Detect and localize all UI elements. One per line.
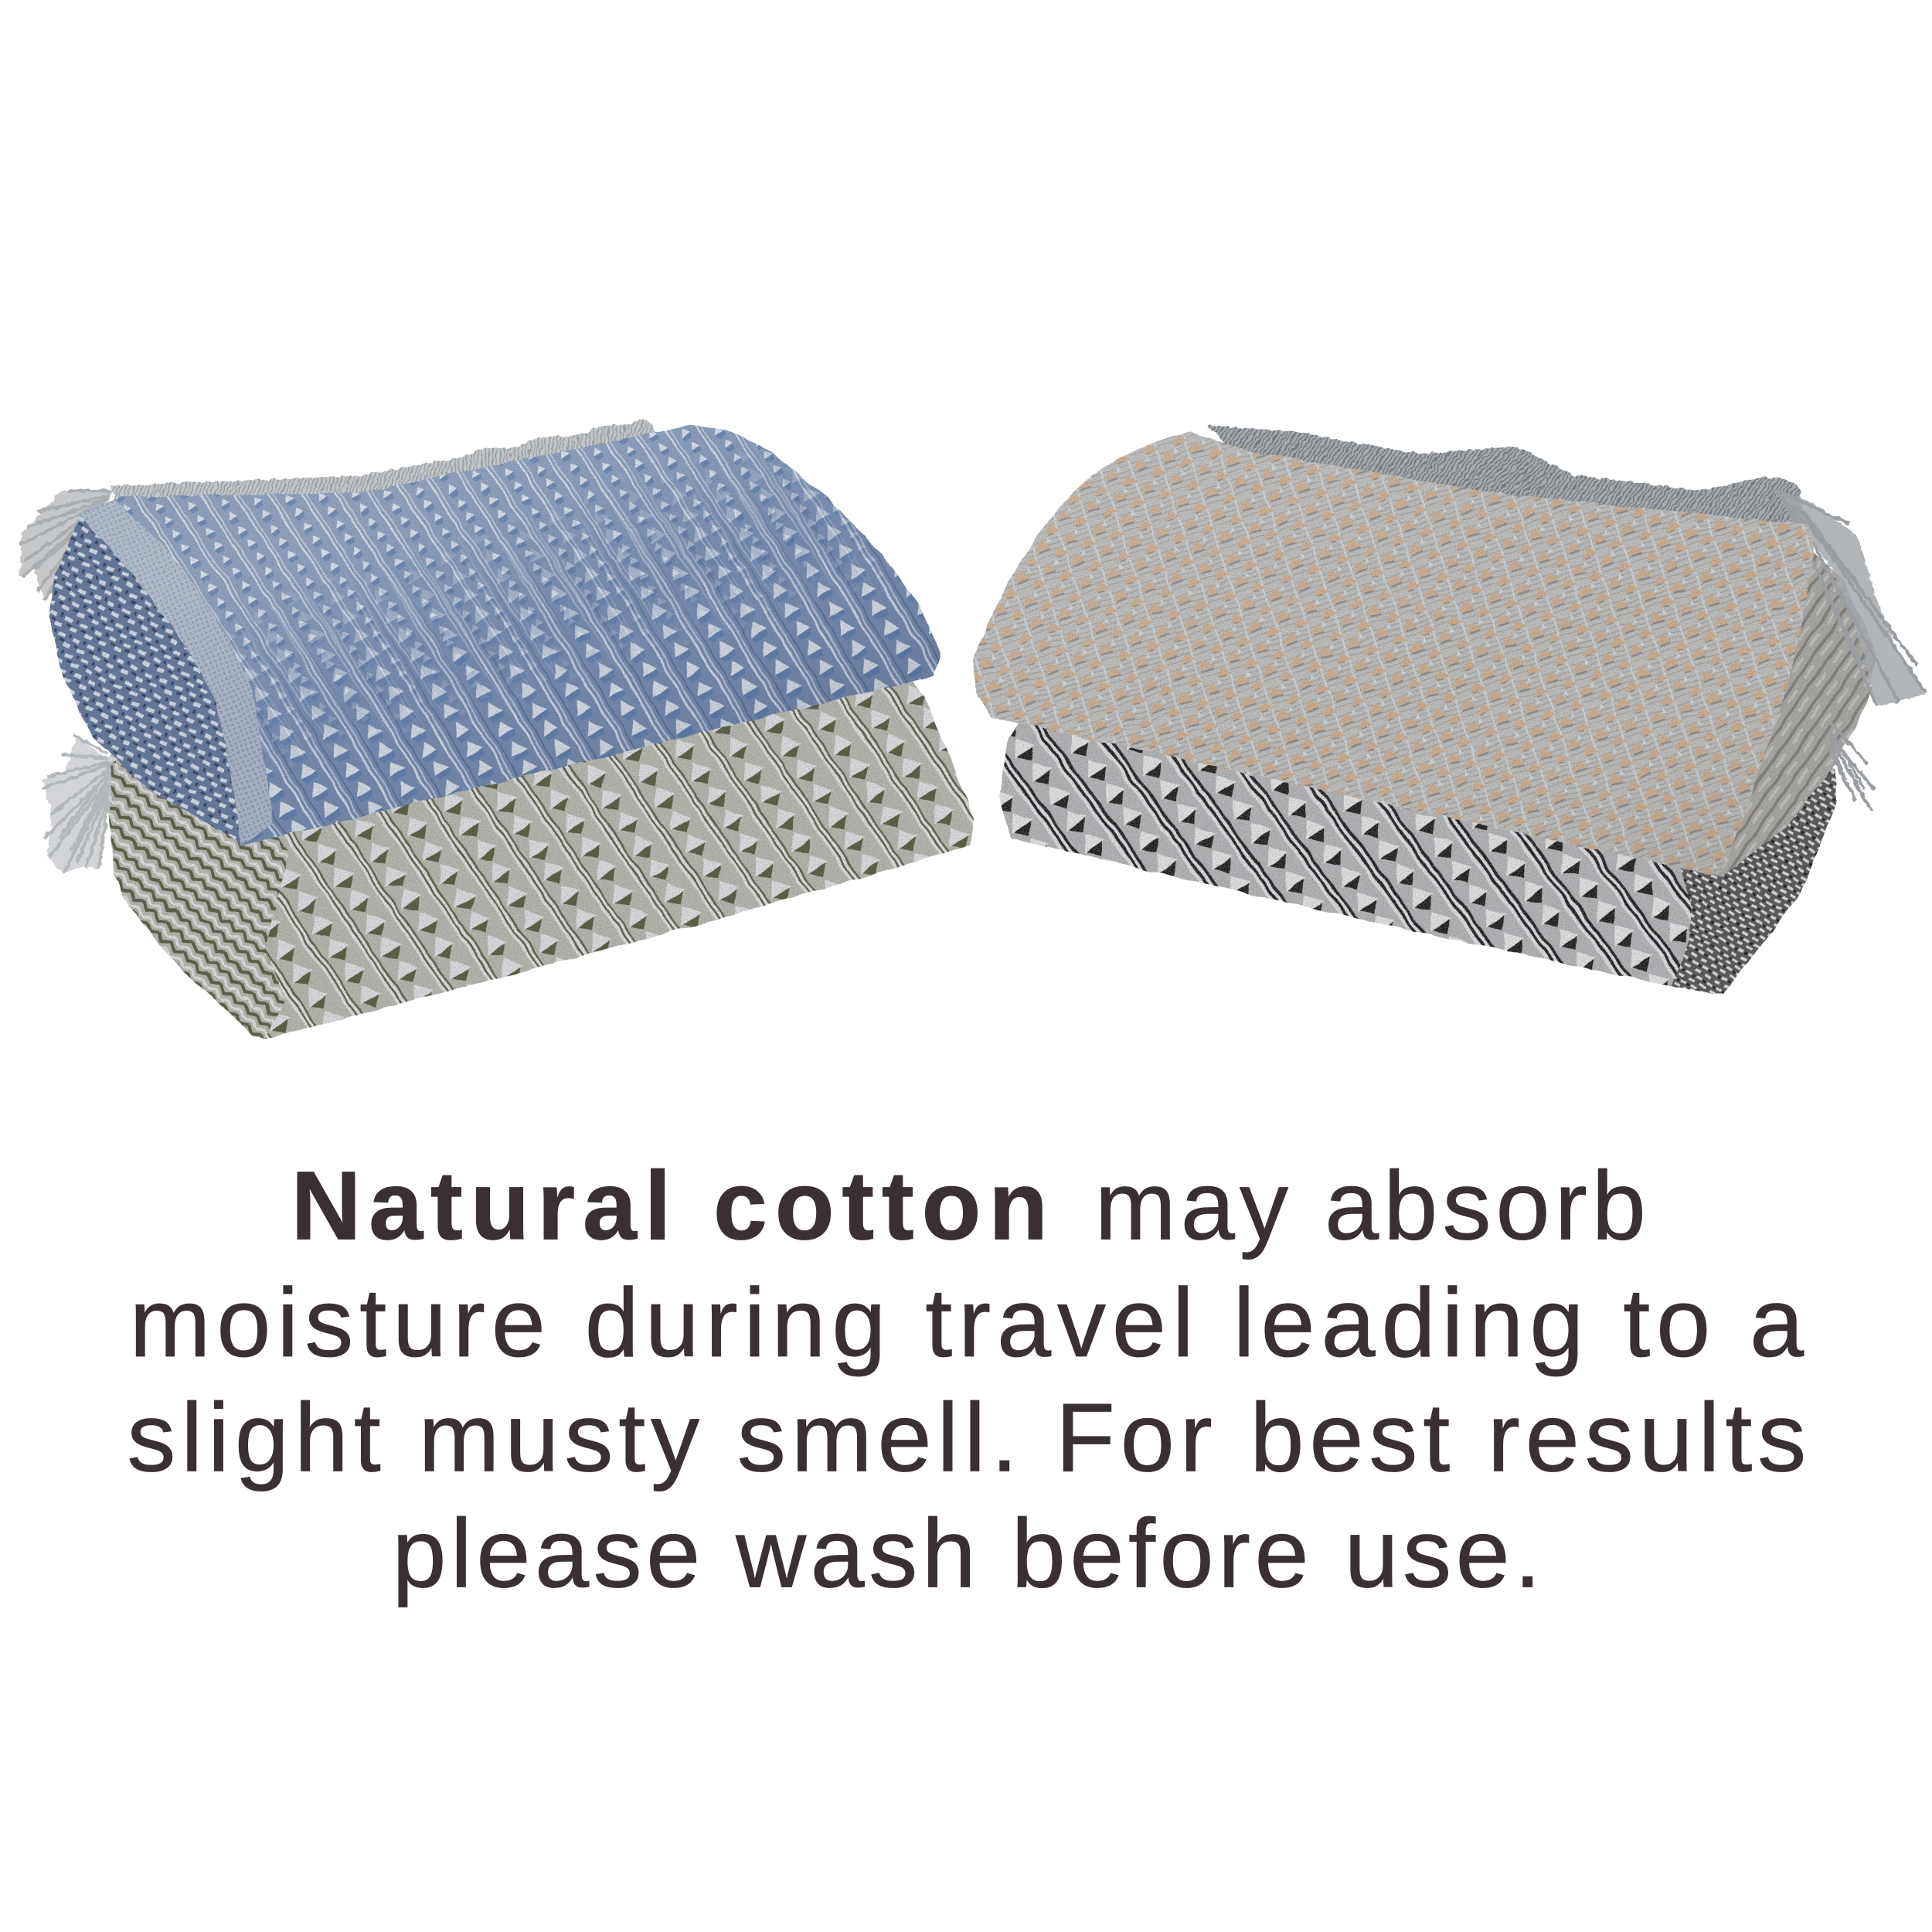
blue throw top fringe	[111, 419, 660, 508]
beige throw top fringe	[1208, 425, 1802, 532]
infographic canvas	[19, 419, 1927, 1607]
blue throw side roll	[49, 515, 247, 849]
olive throw	[105, 617, 974, 1039]
beige throw face	[974, 431, 1815, 876]
line 1: remainder: may absorb	[1095, 1151, 1646, 1260]
lower left tassel	[42, 735, 111, 873]
blue throw face	[80, 425, 940, 845]
photo: black and beige throw stack	[974, 425, 1928, 994]
caption text	[127, 1151, 1806, 1607]
line 4: please wash before use.	[392, 1498, 1541, 1607]
line 3: slight musty smell. For best results	[127, 1383, 1806, 1492]
black throw	[998, 666, 1837, 994]
right tassels	[1773, 488, 1928, 811]
line 1: bold lead-in: Natural cotton	[291, 1151, 1048, 1260]
upper left tassel	[20, 491, 114, 600]
beige throw right roll	[1720, 518, 1876, 878]
photo: olive and blue throw stack	[20, 419, 974, 1039]
line 2: moisture during travel leading to a	[130, 1268, 1804, 1377]
